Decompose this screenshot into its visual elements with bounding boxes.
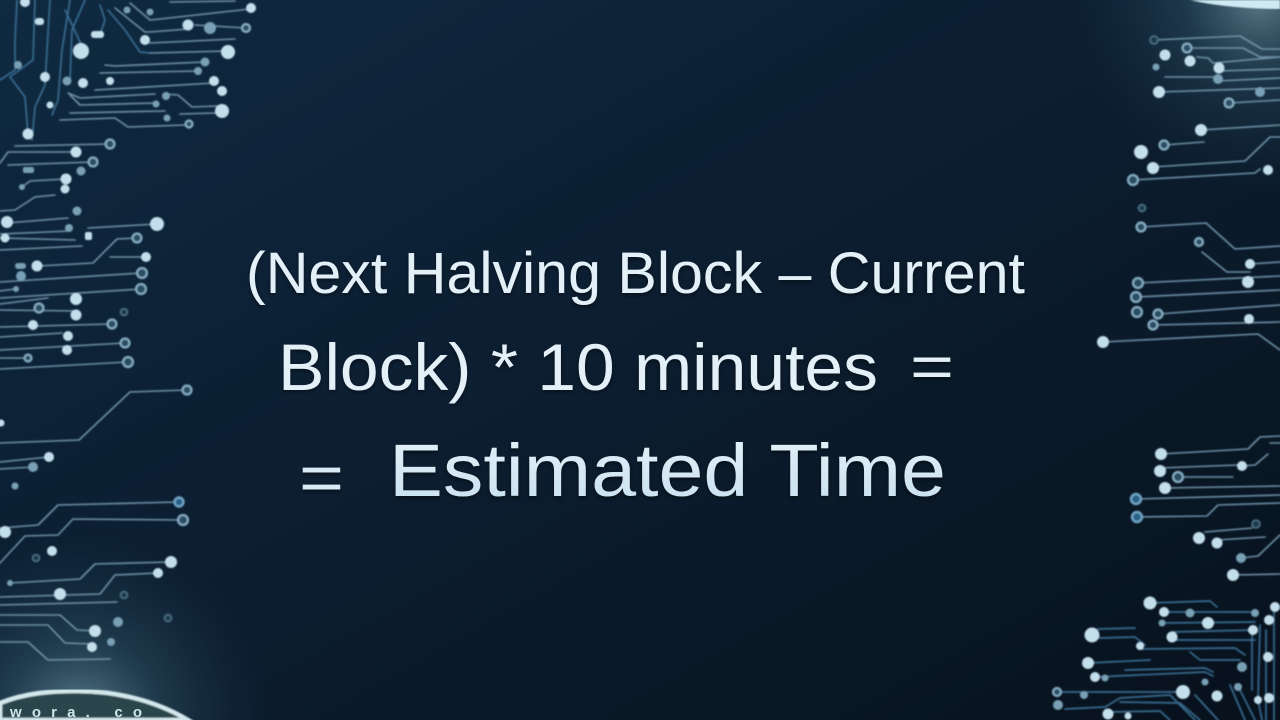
circuit: bottom left [0, 482, 188, 660]
equals sign, line 2: = [910, 333, 954, 400]
circuit: lower right [1131, 436, 1280, 581]
coin: bottom left [0, 691, 188, 720]
glow: top right [1050, 0, 1280, 200]
circuit: top right [1128, 36, 1280, 212]
formula text [246, 241, 1025, 516]
glow: bottom left [0, 520, 290, 720]
circuit: bottom right [1053, 596, 1280, 720]
coin: top right [1190, 0, 1280, 9]
formula line 2: Block) * 10 minutes [278, 330, 878, 404]
circuit: middle right [1097, 222, 1280, 350]
result: Estimated Time: Estimated Time [389, 429, 946, 512]
circuit: top left [0, 0, 256, 211]
formula line 1: (Next Halving Block – Current [246, 241, 1025, 306]
equals sign, line 3: = [299, 440, 344, 516]
circuit: middle left [0, 206, 192, 472]
